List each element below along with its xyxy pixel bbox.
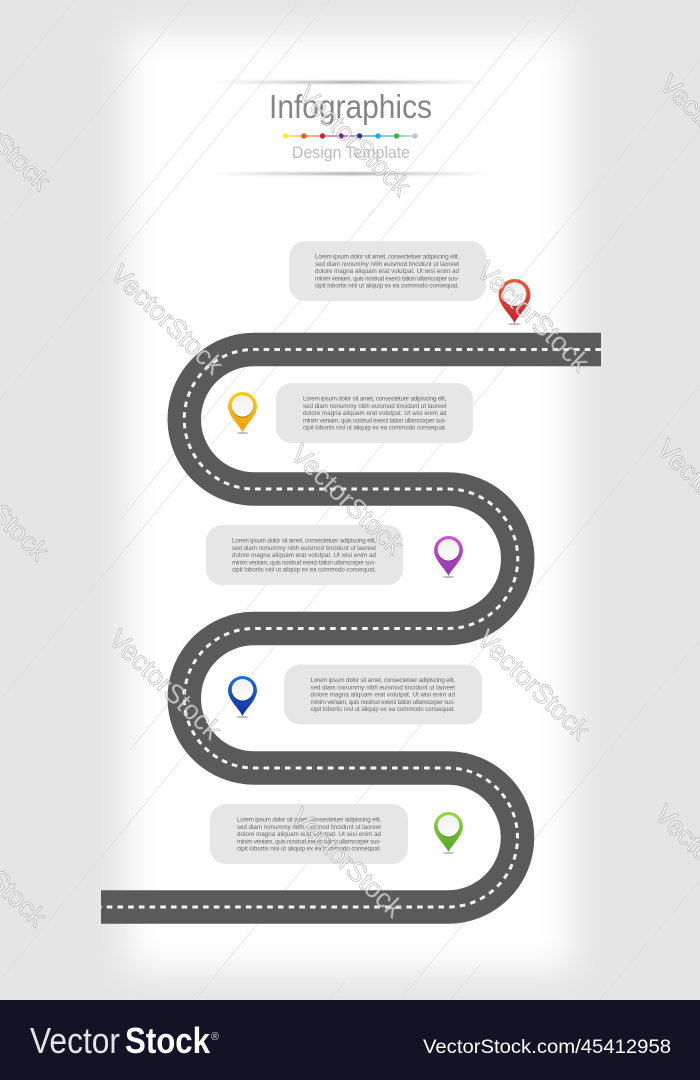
step 1: text box: Lorem ipsum dolor sit amet, consectetuer adipiscing elit, [315, 254, 459, 260]
step 5: text box: minim veniam, quis nostrud exerci tation ullamcorper sus- [237, 838, 381, 845]
watermarks: VectorStock [285, 439, 410, 561]
step 4: text box: cipit lobortis nisl ut aliquip ex ea commodo consequat. [310, 706, 455, 713]
step 5: text box: sed diam nonummy nibh euismod tincidunt ut laoreet [237, 824, 381, 831]
subheading: Design Template: Design Template [292, 144, 410, 162]
heading: Infographics: Infographics [269, 88, 432, 125]
step 5: text box: cipit lobortis nisl ut aliquip ex ea commodo consequat. [237, 846, 381, 853]
step 4: blue pin [228, 676, 257, 718]
step 2: text box: minim veniam, quis nostrud exerci tation ullamcorper sus- [303, 417, 446, 424]
watermarks: VectorStock [103, 624, 228, 746]
step 4: text box: Lorem ipsum dolor sit amet, consectetuer adipiscing elit, [310, 677, 455, 684]
step 3: text box: dolore magna aliquam erat volutpat. Ut wisi enim ad [232, 552, 377, 559]
step 5: text box: Lorem ipsum dolor sit amet, consectetuer adipiscing elit, [237, 816, 381, 824]
top rule [212, 81, 490, 83]
step 2: text box: sed diam nonummy nibh euismod tincidunt ut laoreet [303, 403, 447, 410]
step 3: text box [206, 525, 403, 585]
step 5: text box: dolore magna aliquam erat volutpat. Ut wisi enim ad [237, 831, 382, 838]
colored dots timeline [283, 133, 418, 139]
watermarks: VectorStock [471, 624, 596, 746]
footer band [0, 1000, 700, 1080]
watermarks: VectorStock [471, 256, 596, 378]
footer logo: Vector: Vector [30, 1020, 120, 1061]
watermarks: VectorStock [292, 80, 417, 202]
step 1: red pin [499, 279, 530, 325]
step 2: text box [276, 383, 473, 443]
step 2: text box: dolore magna aliquam erat volutpat. Ut wisi enim ad [303, 410, 447, 417]
winding road [101, 350, 601, 907]
step 3: text box: minim veniam, quis nostrud exerci tation ullamcorper sus- [232, 559, 376, 566]
footer image id: VectorStock.com/45412958 [423, 1037, 671, 1058]
step 4: text box [284, 664, 482, 724]
title header [212, 81, 490, 175]
step 3: purple pin [434, 536, 463, 578]
watermarks: VectorStock [105, 259, 230, 381]
step 1: text box: dolore magna aliquam erat volutpat. Ut wisi enim ad [315, 268, 460, 275]
step 5: text box [210, 804, 408, 864]
step 5: green pin [434, 812, 463, 854]
step 3: text box: cipit lobortis nisl ut aliquip ex ea commodo consequat. [232, 567, 376, 574]
step 3: text box: sed diam nonummy nibh euismod tincidunt ut laoreet [232, 545, 376, 552]
step 3: text box: Lorem ipsum dolor sit amet, consectetuer adipiscing elit, [232, 538, 376, 544]
bottom rule [212, 172, 490, 175]
footer logo: Stock: Stock [125, 1020, 211, 1061]
step 2: yellow pin [228, 392, 257, 434]
watermarks: VectorStock [285, 802, 410, 924]
step 4: text box: sed diam nonummy nibh euismod tincidunt ut laoreet [310, 684, 455, 691]
step 2: text box: Lorem ipsum dolor sit amet, consectetuer adipiscing elit, [303, 396, 447, 402]
step 1: text box: cipit lobortis nisl ut aliquip ex ea commodo consequat. [315, 283, 459, 290]
step 1: text box: sed diam nonummy nibh euismod tincidunt ut laoreet [315, 261, 459, 268]
step 4: text box: dolore magna aliquam erat volutpat. Ut wisi enim ad [310, 692, 456, 699]
step 1: text box: minim veniam, quis nostrud exerci tation ullamcorper sus- [315, 275, 459, 282]
step 4: text box: minim veniam, quis nostrud exerci tation ullamcorper sus- [310, 699, 455, 706]
step 1: text box [289, 241, 486, 301]
registered mark: ® [211, 1031, 219, 1043]
step 2: text box: cipit lobortis nisl ut aliquip ex ea commodo consequat. [303, 425, 447, 432]
